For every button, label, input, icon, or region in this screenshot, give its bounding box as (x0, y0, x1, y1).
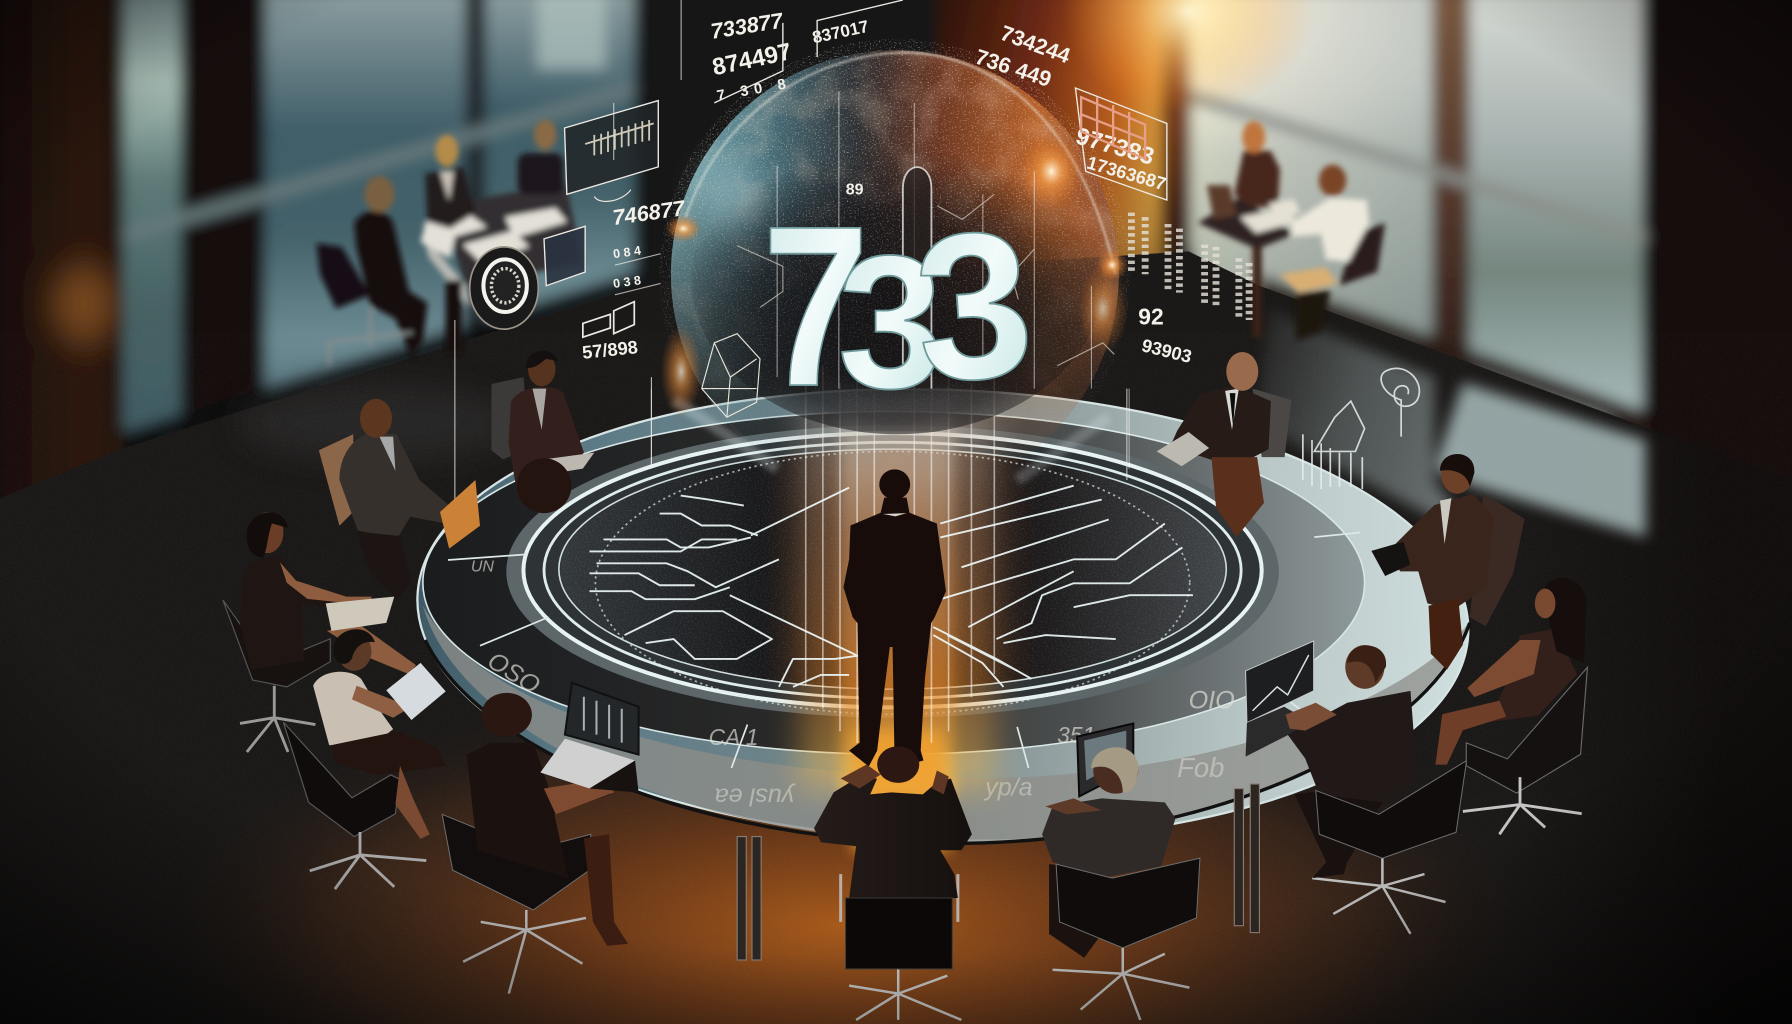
reflection (1211, 457, 1264, 537)
seated man with raised hands (814, 746, 972, 1020)
left side people (223, 351, 594, 889)
floor reflection right (1434, 383, 1646, 537)
shirt (1440, 498, 1451, 544)
table leg (1253, 246, 1262, 337)
label: 0 8 4 (612, 244, 642, 261)
top frame left (714, 0, 903, 103)
arm (352, 686, 405, 718)
hair (1440, 454, 1474, 487)
chair (1470, 494, 1525, 626)
seated man with laptop (1246, 641, 1467, 934)
left mullion (465, 0, 486, 354)
person rear head (534, 120, 557, 150)
orange folder (440, 480, 480, 549)
front people and furniture (442, 641, 1467, 1020)
right dark wall (1642, 0, 1792, 491)
narrow left window (123, 0, 181, 446)
leg right (1250, 784, 1259, 933)
far right window (1470, 0, 1645, 423)
right pillar (1432, 0, 1470, 400)
woman body (1234, 151, 1280, 208)
main left window (265, 0, 465, 400)
label: OSO (483, 646, 545, 700)
chair base (310, 832, 426, 889)
background office windows (0, 0, 1792, 514)
table bottom shade (423, 606, 1469, 842)
head (337, 632, 371, 671)
digit 3: 3 (838, 216, 943, 428)
label: yusl ea (715, 783, 796, 811)
chart line (1253, 655, 1309, 711)
man right of table (1371, 454, 1525, 670)
person center head (435, 135, 458, 167)
table side (423, 234, 471, 309)
laptop screen glow (1084, 731, 1126, 780)
chair (1339, 223, 1385, 286)
person center body (425, 167, 475, 229)
outer white ring (523, 433, 1262, 707)
left sill (123, 272, 634, 457)
keyboard (540, 739, 635, 788)
seal inner (491, 269, 519, 303)
hair (1091, 747, 1138, 793)
pattern columns right (1131, 213, 1249, 320)
label: 0 3 8 (612, 273, 642, 291)
jacket (1288, 691, 1417, 802)
shirt (1225, 389, 1239, 430)
vertical data lines (651, 91, 1129, 469)
leg (1435, 701, 1506, 765)
spark (665, 215, 702, 242)
reflection (517, 458, 571, 513)
sphere dark interior (691, 126, 1103, 434)
seal ring (483, 259, 527, 312)
seal outer (470, 247, 538, 329)
jacket (339, 432, 451, 539)
label: 351 (1057, 722, 1095, 748)
floor (0, 251, 1792, 1024)
label: 93903 (1140, 334, 1194, 367)
label: 746877 (611, 195, 687, 230)
beam glow (800, 389, 994, 789)
right side people (1157, 352, 1587, 834)
label: UN (471, 558, 494, 575)
disk lower ring dots (595, 451, 1190, 714)
shirt (533, 389, 546, 430)
chair (442, 814, 591, 910)
hair (333, 629, 375, 664)
papers (421, 208, 567, 263)
tan chair (319, 434, 355, 526)
papers (1240, 199, 1301, 233)
floor mid reflection (1257, 309, 1474, 537)
warm wall glow (50, 263, 119, 345)
hands (841, 765, 949, 794)
papers (326, 597, 394, 631)
person rear body (518, 153, 563, 194)
label: CA 1 (709, 724, 759, 750)
hair (1347, 645, 1386, 683)
left floor tint (240, 386, 514, 459)
digit 3: 3 (908, 187, 1040, 427)
central capsule (903, 167, 931, 389)
vertical tall lines (455, 320, 1127, 503)
arm (1467, 640, 1541, 697)
monitor frame (565, 101, 658, 194)
reflection (1429, 599, 1463, 670)
leg (395, 766, 430, 839)
label: Fob (1177, 752, 1224, 783)
person center shirt (440, 171, 454, 201)
wire frame (702, 334, 760, 417)
chair back (846, 898, 952, 969)
glow left (702, 160, 761, 229)
head (251, 512, 283, 553)
chair (491, 377, 530, 459)
big number 733 (762, 178, 1040, 434)
table leg (446, 280, 462, 354)
lower sparkle band right (1017, 417, 1109, 480)
head (528, 352, 555, 386)
chair base (1053, 946, 1189, 1020)
chair (1056, 858, 1200, 948)
woman far left (223, 512, 416, 752)
head (879, 469, 910, 500)
laptop screen (565, 683, 639, 755)
hair (1543, 578, 1586, 663)
lower body (1049, 864, 1109, 958)
label: 874497 (710, 38, 794, 81)
right table icons (1303, 368, 1419, 489)
head (360, 399, 392, 438)
bald man top right (1157, 352, 1291, 537)
beam foot (851, 731, 951, 851)
right rail (1191, 89, 1646, 243)
floor base (0, 251, 1792, 1024)
laptop (1207, 185, 1237, 219)
laptop side (589, 761, 639, 792)
head (1093, 747, 1138, 794)
person left head (365, 176, 394, 213)
left rail (123, 82, 634, 242)
arm (544, 778, 614, 814)
label: OIO (1189, 687, 1235, 715)
small panel (544, 226, 585, 286)
man shirt (1291, 198, 1369, 262)
leg (584, 834, 628, 946)
label: 734244 (997, 20, 1074, 68)
chair (1466, 667, 1587, 793)
legs (1295, 782, 1382, 878)
chair (1253, 389, 1291, 457)
monitor bars (585, 120, 654, 155)
hex mesh icon (1303, 401, 1365, 489)
label: 837017 (810, 16, 870, 47)
woman head (1242, 121, 1265, 153)
table right (1198, 197, 1294, 249)
label: 7 30 8 (716, 76, 793, 105)
second white ring (544, 442, 1241, 698)
chair base (326, 306, 413, 366)
chair base (849, 966, 961, 1020)
tablet (386, 663, 446, 720)
holographic table (410, 372, 1476, 858)
loop icon (1381, 368, 1419, 437)
glow right (1019, 133, 1083, 210)
monitor panel (565, 101, 658, 201)
right window shade (1191, 0, 1435, 354)
beam core (840, 394, 954, 794)
sphere sparkle (660, 38, 1130, 434)
tie (1230, 393, 1235, 427)
sun flare (1063, 0, 1314, 114)
chair arms (841, 874, 958, 922)
label: 17363687 (1085, 152, 1169, 194)
label: 57/898 (581, 336, 639, 363)
body (814, 778, 972, 898)
small pills (583, 302, 634, 337)
hair (526, 351, 558, 368)
jacket (509, 387, 584, 505)
hair (247, 512, 288, 558)
warm particles lower right (1078, 263, 1128, 354)
body (467, 743, 611, 878)
sphere rim highlight (686, 53, 1115, 274)
table left (440, 183, 583, 286)
second left window (486, 0, 634, 331)
column (1168, 224, 1179, 293)
sphere mottling (676, 50, 1118, 378)
body (240, 557, 338, 670)
band inner fill (506, 425, 1279, 718)
digit 7: 7 (762, 178, 869, 434)
label: yp/a (983, 773, 1033, 801)
hair and head (877, 746, 919, 783)
right sill (1257, 274, 1646, 432)
holographic data labels (581, 8, 1194, 367)
table edge (425, 623, 1470, 843)
warm particles lower left (661, 326, 702, 417)
jacket (1391, 494, 1494, 610)
chair base (1312, 858, 1446, 934)
chair (283, 722, 400, 837)
collar (883, 513, 907, 516)
man head (1319, 165, 1346, 197)
glass orb (651, 39, 1130, 510)
chair (317, 243, 370, 309)
sphere body (671, 50, 1119, 498)
leg left (737, 837, 746, 960)
hand and device (1371, 542, 1410, 576)
skirt (331, 731, 446, 775)
hand (1046, 798, 1102, 814)
person left body (354, 211, 427, 358)
jacket (1168, 385, 1271, 467)
white top (313, 672, 393, 745)
grid frame (1075, 88, 1167, 200)
woman far right (1435, 578, 1587, 834)
dark hologram backdrop (634, 0, 943, 377)
body (843, 498, 946, 769)
disk grain (561, 450, 1224, 688)
left pillar (181, 0, 265, 423)
lower sparkle band left (674, 400, 777, 469)
man in suit left (319, 399, 480, 600)
chair (223, 600, 330, 687)
standing man silhouette (843, 469, 946, 769)
column (1131, 213, 1145, 274)
circuit traces (589, 486, 1193, 687)
woman with laptop (442, 683, 639, 994)
central light column (800, 366, 994, 851)
monitor stand (594, 190, 631, 201)
screen streaks (584, 697, 622, 743)
jacket (1042, 798, 1175, 878)
notebook (544, 453, 594, 473)
man legs (1280, 267, 1337, 293)
left column labels (614, 0, 681, 295)
table legs (737, 784, 1259, 960)
label: 733877 (709, 8, 785, 44)
grid cells (1081, 97, 1145, 159)
chair base (240, 686, 315, 752)
head (1226, 352, 1258, 391)
warm floor glow (114, 686, 1600, 1024)
chair base (1463, 777, 1582, 834)
floor grain (0, 331, 1792, 1024)
laptop (1077, 724, 1133, 796)
label: 92 (1138, 304, 1164, 330)
face (1535, 589, 1555, 618)
book (1157, 432, 1209, 466)
table scribbled labels (471, 558, 1235, 811)
spark (1096, 249, 1128, 281)
laptop screen (1246, 641, 1314, 723)
head (1345, 645, 1385, 689)
woman with tablet (283, 629, 446, 889)
dress (1488, 629, 1577, 722)
label: 89 (846, 181, 864, 198)
head (1441, 455, 1473, 494)
legs (327, 624, 416, 674)
grid panel (1075, 88, 1167, 200)
chair (1316, 761, 1467, 858)
table segment dividers (448, 533, 1360, 768)
right window (1191, 0, 1435, 354)
backdrop fade (937, 69, 1166, 377)
man lower legs (1296, 290, 1330, 341)
streaks (806, 366, 994, 743)
leg left (752, 837, 761, 960)
hands (1286, 703, 1337, 731)
label: 736 449 (972, 44, 1055, 92)
chair base (463, 910, 586, 994)
arm (280, 562, 371, 606)
woman at top left (491, 351, 594, 513)
leg right (1234, 789, 1243, 926)
legs (357, 531, 411, 600)
shirt (379, 437, 395, 471)
seated man with gray hair (1042, 724, 1200, 1020)
circuit outlines (737, 194, 1114, 366)
background meeting right (1198, 121, 1385, 341)
mottled surface (676, 50, 1118, 378)
seal icon (470, 247, 538, 329)
circuit disk (559, 449, 1226, 689)
left wall (0, 0, 123, 514)
head (481, 693, 532, 737)
dark ring band (423, 411, 1365, 754)
sparkle particles (660, 38, 1130, 434)
background meeting left (317, 120, 583, 366)
holographic panels (455, 0, 1167, 503)
label: 977383 (1073, 123, 1157, 171)
column (1205, 245, 1216, 306)
red backdrop (937, 0, 1166, 377)
bright sky patch (537, 0, 606, 69)
table top (410, 372, 1476, 858)
sunlit column (1161, 0, 1193, 251)
laptop base (1246, 707, 1312, 757)
column (1239, 258, 1249, 320)
